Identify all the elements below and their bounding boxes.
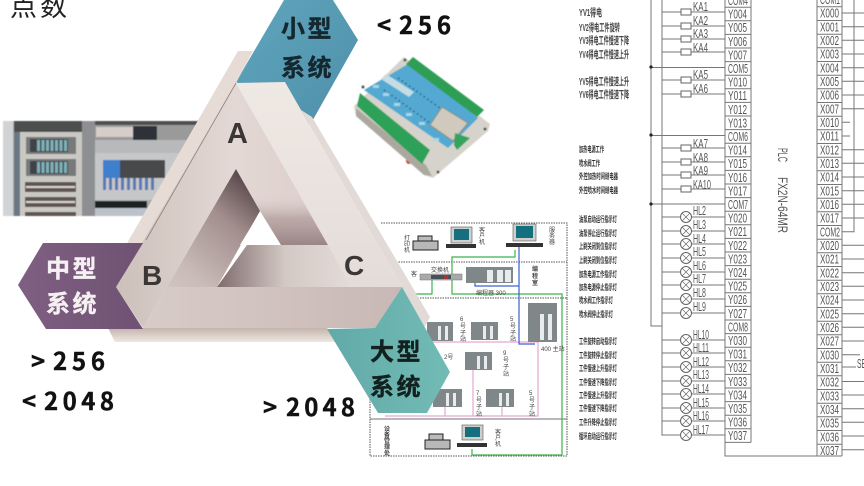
label: 小型系统: 小型	[281, 16, 334, 43]
PLC output terminal column Y	[725, 0, 842, 456]
input terminal labels	[820, 0, 840, 458]
wiring diagram: left labels	[579, 6, 629, 441]
bus wires	[651, 0, 725, 436]
icon: PLC controller module	[354, 57, 490, 178]
value: < 256: 256	[399, 6, 451, 41]
output terminal labels: Y004	[728, 7, 747, 22]
lamp crosses	[682, 214, 690, 438]
input terminal labels: X006	[820, 88, 839, 103]
network labels: 站	[503, 370, 509, 378]
letter B: B	[142, 260, 162, 291]
network labels: 户	[479, 232, 485, 240]
network labels: 9	[503, 351, 507, 357]
input terminal labels: X014	[820, 170, 839, 185]
network labels: 号	[503, 357, 509, 364]
input wiring	[842, 0, 864, 450]
network labels: 务	[549, 232, 555, 240]
bus line	[370, 418, 567, 420]
printer top	[413, 236, 438, 250]
text: YV4得电工件慢速上升	[579, 48, 629, 61]
output terminal labels: Y015	[728, 156, 747, 171]
output terminal labels: COM5	[728, 61, 748, 76]
network labels: 编	[532, 265, 538, 273]
input terminal labels: COM2	[820, 224, 840, 239]
network labels: 室	[532, 279, 538, 287]
lamp labels: HL6	[693, 258, 706, 273]
PLC model label: FX2N-64MR	[775, 177, 791, 233]
workstation: server	[506, 224, 543, 247]
penrose triangle	[108, 51, 430, 345]
network labels: 客	[495, 428, 501, 436]
input terminal labels: X026	[820, 320, 839, 335]
wiring diagram: left labels: 外控喷水时间继电器	[579, 185, 618, 195]
input terminal labels: X000	[820, 6, 839, 21]
PLC rack: substation A	[427, 322, 453, 341]
lamp labels: HL8	[693, 285, 706, 300]
wiring diagram: left labels: 循环启动运行指示灯	[579, 431, 617, 441]
lamp labels: HL7	[693, 271, 706, 286]
value: > 256: 256	[53, 342, 105, 377]
PLC rack: substation C	[465, 352, 492, 370]
input terminal labels: X022	[820, 265, 839, 280]
relay labels: KA6	[693, 81, 708, 96]
network labels: 编程器 300	[476, 289, 506, 297]
panel label strip	[381, 74, 414, 97]
wiring diagram: left labels: 工件旋转停止指示灯	[579, 350, 617, 360]
input terminal labels: X007	[820, 101, 839, 116]
network labels: 机	[495, 440, 501, 448]
wiring diagram: left labels: 工件慢速上升指示灯	[579, 390, 617, 400]
input terminal labels: X035	[820, 416, 839, 431]
corner screws	[362, 58, 486, 174]
wiring diagram: left labels: 加热电源工作	[579, 144, 604, 154]
input terminal labels: X016	[820, 197, 839, 212]
output terminal labels: Y014	[728, 143, 747, 158]
wiring diagram: left labels: 工件慢速下降指示灯	[579, 377, 617, 387]
photo: PLC control cabinet	[3, 121, 200, 216]
output terminal labels	[728, 0, 748, 443]
label: 小型系统: 系统	[281, 55, 334, 82]
printer bottom	[425, 434, 450, 449]
wiring diagram: left labels: 油泵停止运行指示灯	[579, 228, 617, 238]
hexagon: medium system	[18, 243, 143, 329]
wiring diagram: left labels: YV1得电	[579, 6, 602, 19]
connector cut-out	[430, 107, 468, 141]
lamp labels: HL13	[693, 367, 709, 382]
left inner dark face	[143, 169, 260, 328]
output terminal labels: Y011	[728, 88, 747, 103]
network labels	[384, 226, 565, 457]
network labels: 子	[460, 330, 466, 337]
input terminal labels: X017	[820, 211, 839, 226]
network architecture diagram	[370, 223, 567, 457]
output terminal labels: Y034	[728, 387, 747, 402]
green terminals lower	[357, 93, 430, 164]
input terminal labels: X020	[820, 238, 839, 253]
output terminal labels: Y027	[728, 306, 747, 321]
output terminal labels: Y025	[728, 279, 747, 294]
label: 中型系统: 系统	[46, 291, 99, 318]
input terminal labels: X010	[820, 115, 839, 130]
lamp symbols	[680, 212, 692, 440]
pink field bus	[385, 342, 538, 416]
label: 大型系统: 系统	[370, 374, 423, 401]
network labels: 机	[404, 246, 410, 254]
label: 中型系统: 中型	[46, 256, 99, 283]
network labels: 子	[503, 364, 509, 371]
network labels: 号	[529, 397, 535, 404]
wiring diagram: left labels: 工件慢速下降指示灯	[579, 403, 617, 413]
label: 大型系统: 大型	[370, 339, 423, 366]
input terminal labels: X021	[820, 252, 839, 267]
text: YV6得电工件慢速下降	[579, 88, 629, 101]
letter A: A	[227, 118, 248, 150]
output terminal labels: Y035	[728, 401, 747, 416]
lamp labels: HL9	[693, 299, 706, 314]
output terminal labels: Y026	[728, 292, 747, 307]
output terminal labels: Y010	[728, 75, 747, 90]
output terminal labels: COM8	[728, 319, 748, 334]
input terminal labels: X034	[820, 402, 839, 417]
bottom face	[143, 287, 402, 328]
output terminal labels: Y007	[728, 47, 747, 62]
network labels: 客	[479, 226, 485, 234]
network labels: 子	[529, 404, 535, 411]
relay labels: KA4	[693, 40, 708, 55]
lamp labels: HL10	[693, 327, 709, 342]
green side connector	[454, 133, 470, 150]
lamp labels: HL15	[693, 395, 709, 410]
output terminal labels: Y006	[728, 34, 747, 49]
value: > 2048: 2048	[286, 388, 355, 423]
workstation: client top	[446, 227, 476, 248]
hexagon: large system	[327, 287, 450, 413]
left edge highlight	[146, 83, 236, 240]
dashed frames	[370, 223, 567, 456]
network labels: 印	[404, 241, 410, 248]
network labels: 客	[411, 270, 417, 278]
lamp labels	[693, 203, 709, 437]
red feet	[368, 122, 412, 164]
label: 小型系统	[281, 16, 334, 82]
network labels: 站	[529, 410, 535, 418]
network labels: 机	[479, 238, 485, 246]
wiring diagram: left labels: 外控加热时间继电器	[579, 171, 618, 181]
network labels: 户	[495, 434, 501, 442]
input terminal labels: X027	[820, 334, 839, 349]
panel indicator dots	[384, 78, 454, 130]
network labels: 5	[529, 391, 533, 397]
hexagon: small system	[236, 0, 358, 125]
wiring diagram: left labels: 喷水阀工作指示灯	[579, 295, 613, 305]
input terminal labels: X025	[820, 306, 839, 321]
relay labels: KA5	[693, 67, 708, 82]
PLC rack: programming station 300	[466, 267, 513, 283]
right leg light face	[236, 82, 402, 287]
PLC rack: substation D	[433, 389, 462, 407]
green ethernet	[410, 250, 562, 455]
output terminal labels: Y024	[728, 265, 747, 280]
green terminals upper	[406, 57, 484, 117]
left leg front face A	[116, 83, 330, 328]
wiring diagram: output relay and lamp circuit	[649, 0, 725, 440]
workstation: management client	[457, 425, 487, 447]
mauve inner gradient	[251, 195, 328, 245]
network labels: 站	[476, 410, 482, 418]
blue panel	[364, 64, 478, 148]
input terminal labels: X005	[820, 74, 839, 89]
output terminal labels: Y016	[728, 170, 747, 185]
input terminal labels: X030	[820, 347, 839, 362]
hole	[240, 212, 280, 245]
network labels: 设	[384, 425, 390, 433]
PLC input terminal column X	[817, 0, 864, 458]
lamp lines	[662, 217, 725, 435]
value: > 2048: >	[263, 388, 277, 423]
network labels: 站	[510, 335, 516, 343]
wiring diagram: left labels: 喷水阀工作	[579, 158, 600, 168]
output terminal labels: Y033	[728, 374, 747, 389]
output terminal labels: COM6	[728, 129, 748, 144]
wiring diagram: left labels: 工件慢速上升指示灯	[579, 363, 617, 373]
output terminal labels: Y022	[728, 238, 747, 253]
lamp labels: HL5	[693, 244, 706, 259]
input terminal labels: X015	[820, 183, 839, 198]
network labels: 号	[460, 323, 466, 330]
blue link	[475, 243, 535, 344]
output terminal labels: COM7	[728, 197, 748, 212]
relay labels: KA9	[693, 163, 708, 178]
network labels: 打	[404, 234, 410, 242]
output terminal labels: Y031	[728, 347, 747, 362]
input terminal labels: X003	[820, 47, 839, 62]
output terminal labels: Y036	[728, 415, 747, 430]
output terminal labels: Y021	[728, 224, 747, 239]
output terminal labels: Y017	[728, 183, 747, 198]
input terminal labels: X033	[820, 388, 839, 403]
text: YV3得电工件慢速下降	[579, 34, 629, 47]
network labels: 处	[384, 449, 390, 457]
output terminal labels: Y032	[728, 360, 747, 375]
network labels: 子	[510, 330, 516, 337]
relay labels: KA3	[693, 26, 708, 41]
network labels: 7	[476, 391, 480, 397]
network labels: 5	[510, 317, 514, 323]
network labels: 子	[476, 404, 482, 411]
network labels: 2号	[444, 354, 453, 361]
network labels: 号	[510, 323, 516, 330]
wiring diagram: left labels: 工件升降停止指示灯	[579, 417, 617, 427]
panel keys	[373, 85, 439, 141]
PLC rack: substation E	[486, 389, 514, 407]
output terminal labels: Y020	[728, 211, 747, 226]
relay labels: KA7	[693, 136, 708, 151]
lamp labels: HL12	[693, 354, 709, 369]
network labels: 理	[384, 444, 390, 451]
lamp labels: HL16	[693, 408, 709, 423]
input terminal labels: X013	[820, 156, 839, 171]
controller housing	[354, 57, 490, 178]
network labels: 站	[460, 335, 466, 343]
junction dots	[649, 65, 653, 206]
lamp labels: HL17	[693, 422, 709, 437]
wiring diagram: left labels: 加热电源停止指示灯	[579, 282, 617, 292]
lamp labels: HL2	[693, 203, 706, 218]
label: 中型系统	[46, 256, 99, 318]
wiring diagram: left labels: 加热电源工作指示灯	[579, 269, 617, 279]
label: 大型系统	[370, 339, 423, 401]
input terminal labels: X036	[820, 429, 839, 444]
lamp labels: HL3	[693, 217, 706, 232]
PLC rack: 400 master	[528, 303, 557, 342]
input terminal labels: X032	[820, 375, 839, 390]
input terminal labels: X024	[820, 293, 839, 308]
output terminal labels: Y037	[728, 428, 747, 443]
network labels: 备	[384, 431, 390, 439]
text: YV5得电工件慢速上升	[579, 75, 629, 88]
output terminal labels: Y013	[728, 115, 747, 130]
network labels: 服	[549, 227, 555, 234]
value: > 256: >	[31, 342, 45, 377]
value: < 256: <	[377, 6, 391, 41]
wiring diagram: left labels: YV2得电工件旋转	[579, 21, 620, 34]
value: < 2048: <	[22, 382, 36, 417]
PLC model label: PLC	[775, 148, 791, 162]
letter C: C	[344, 250, 364, 281]
input terminal labels: X004	[820, 60, 839, 75]
wiring diagram: left labels: 上刷关闭到位指示灯	[579, 241, 617, 251]
horizontal top face with label C	[217, 245, 352, 287]
network labels: 400 主站	[541, 345, 565, 353]
input terminal labels: X037	[820, 443, 839, 458]
output terminal labels: Y023	[728, 251, 747, 266]
output terminal labels: Y030	[728, 333, 747, 348]
relay labels: KA2	[693, 13, 708, 28]
network labels: 程	[532, 272, 538, 280]
lamp labels: HL11	[693, 340, 709, 355]
wiring diagram: left labels: 上刷关闭到位指示灯	[579, 255, 617, 265]
relay labels: KA10	[693, 177, 711, 192]
value: < 2048: 2048	[44, 382, 114, 417]
relay labels	[693, 0, 711, 192]
switch	[420, 274, 462, 280]
network labels: 器	[549, 239, 555, 246]
output terminal labels: Y005	[728, 20, 747, 35]
input terminal labels: X011	[820, 129, 839, 144]
input terminal labels: X031	[820, 361, 839, 376]
side wall shadow	[356, 108, 432, 176]
back band and shadows	[126, 51, 253, 245]
lamp labels: HL14	[693, 381, 709, 396]
network labels: 6	[460, 317, 464, 323]
network labels: 号	[476, 397, 482, 404]
network labels: 管	[384, 437, 390, 445]
PLC model label	[775, 148, 791, 233]
lamp labels: HL4	[693, 231, 706, 246]
wiring diagram: left labels: 喷水阀停止指示灯	[579, 309, 613, 319]
relay coils and lines	[662, 9, 725, 192]
input terminal labels: X012	[820, 142, 839, 157]
output terminal labels: Y012	[728, 102, 747, 117]
network labels: 交换机	[431, 266, 449, 274]
input terminal labels: X001	[820, 19, 839, 34]
PLC rack: substation B	[471, 322, 498, 340]
wiring diagram: left labels: 工件旋转启动指示灯	[579, 336, 617, 346]
input terminal labels: X023	[820, 279, 839, 294]
relay labels: KA8	[693, 150, 708, 165]
input terminal labels: X002	[820, 33, 839, 48]
wiring diagram: left labels: 油泵启动运行指示灯	[579, 214, 617, 224]
